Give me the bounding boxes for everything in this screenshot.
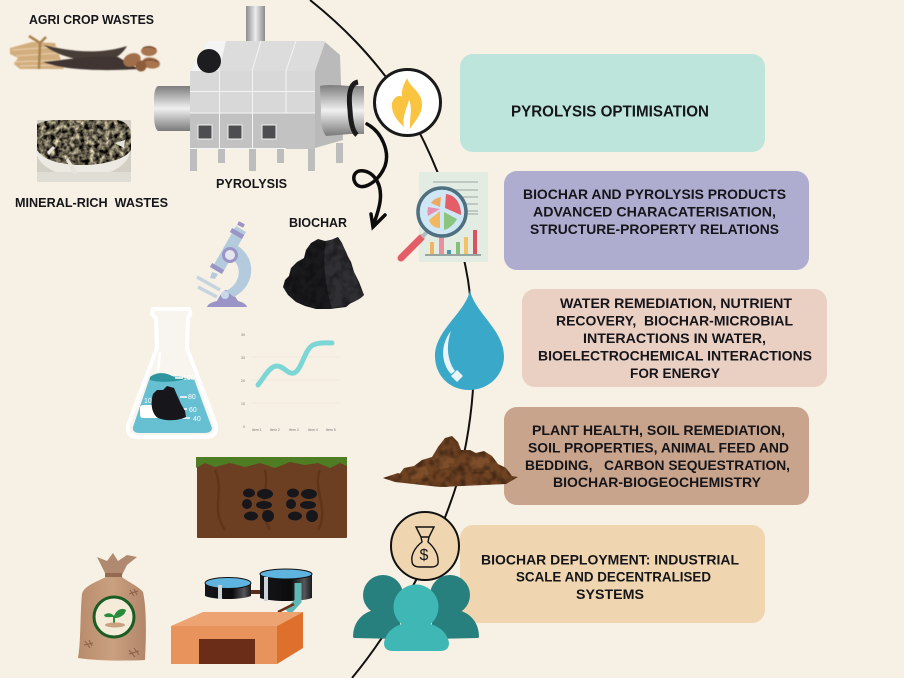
chart: line chart: 0 <box>243 425 245 429</box>
icon: flask with biochar: 40 <box>193 416 201 423</box>
chart: line chart <box>241 333 340 432</box>
panel: soil and plant health: BEDDING, CARBON SEQUESTRATION, <box>525 458 790 473</box>
icon: water drop <box>435 290 504 390</box>
icon: flask with biochar: 80 <box>188 394 196 401</box>
chart: line chart: Item 2 <box>270 428 280 432</box>
icon: money bag <box>391 512 459 580</box>
panel: deployment: SCALE AND DECENTRALISED <box>516 570 711 584</box>
timeline curve <box>310 0 474 678</box>
panel: characterisation <box>504 171 809 270</box>
panel: soil and plant health: BIOCHAR-BIOGEOCHEMISTRY <box>553 475 761 490</box>
icon: flame magnifier <box>374 70 440 136</box>
chart: line chart: 30 <box>241 333 245 337</box>
panel: water remediation: FOR ENERGY <box>630 366 720 381</box>
panel: soil and plant health: PLANT HEALTH, SOIL REMEDIATION, <box>532 423 785 438</box>
icon: money bag: $ <box>420 547 428 564</box>
heading: pyrolysis optimisation: PYROLYSIS OPTIMISATION <box>511 104 709 120</box>
icon: crop wastes <box>10 36 161 72</box>
icon: soil cross-section with biochar <box>196 457 347 538</box>
icon: data analysis report <box>401 172 488 262</box>
icon: flask with biochar: 60 <box>189 407 197 414</box>
icon: community group <box>353 575 479 651</box>
panel: water remediation <box>522 289 827 387</box>
icon: pyrolysis machine <box>154 6 364 171</box>
label: mineral-rich wastes: MINERAL-RICH WASTES <box>15 196 168 210</box>
chart: line chart: Item 3 <box>289 428 299 432</box>
panel: soil and plant health: SOIL PROPERTIES, ANIMAL FEED AND <box>528 440 789 456</box>
chart: line chart: 30 <box>241 356 245 360</box>
panel: pyrolysis optimisation <box>460 54 765 152</box>
panel: deployment: BIOCHAR DEPLOYMENT: INDUSTRIAL <box>481 552 739 568</box>
chart: line chart: Item 1 <box>252 428 262 432</box>
chart: line chart: Item 5 <box>326 428 336 432</box>
arrow: pyrolysis to biochar <box>354 124 386 227</box>
icon: brick kiln <box>171 612 303 664</box>
icon: flask with biochar <box>128 309 216 437</box>
chart: line chart: 20 <box>241 379 245 383</box>
panel: characterisation: STRUCTURE-PROPERTY RELATIONS <box>530 222 779 237</box>
panel: water remediation: WATER REMEDIATION, NUTRIENT <box>560 296 793 311</box>
icon: flask with biochar: 100 <box>144 398 156 405</box>
icon: microscope <box>197 223 251 307</box>
panel: water remediation: BIOELECTROCHEMICAL INTERACTIONS <box>538 348 812 364</box>
label: pyrolysis: PYROLYSIS <box>216 177 287 191</box>
panel: deployment: SYSTEMS <box>576 587 644 602</box>
panel: water remediation: INTERACTIONS IN WATER, <box>583 331 766 346</box>
chart: line chart: 10 <box>241 402 245 406</box>
icon: small tank <box>205 578 251 599</box>
panel: characterisation: ADVANCED CHARACATERISATION, <box>533 204 776 220</box>
label: biochar: BIOCHAR <box>289 216 347 230</box>
icon: mineral-rich wastes <box>36 120 131 182</box>
icon: biochar lump <box>283 237 364 309</box>
label: agri crop wastes: AGRI CROP WASTES <box>29 13 154 27</box>
icon: flask with biochar: 100 <box>183 375 195 382</box>
panel: soil and plant health <box>504 407 809 505</box>
panel: characterisation: BIOCHAR AND PYROLYSIS PRODUCTS <box>523 187 786 202</box>
icon: large tank <box>251 569 312 612</box>
chart: line chart: Item 4 <box>308 428 318 432</box>
panel: water remediation: RECOVERY, BIOCHAR-MICROBIAL <box>556 314 793 328</box>
icon: fertiliser sack <box>78 553 146 661</box>
panel: deployment <box>460 525 765 623</box>
icon: soil pile <box>383 436 518 487</box>
